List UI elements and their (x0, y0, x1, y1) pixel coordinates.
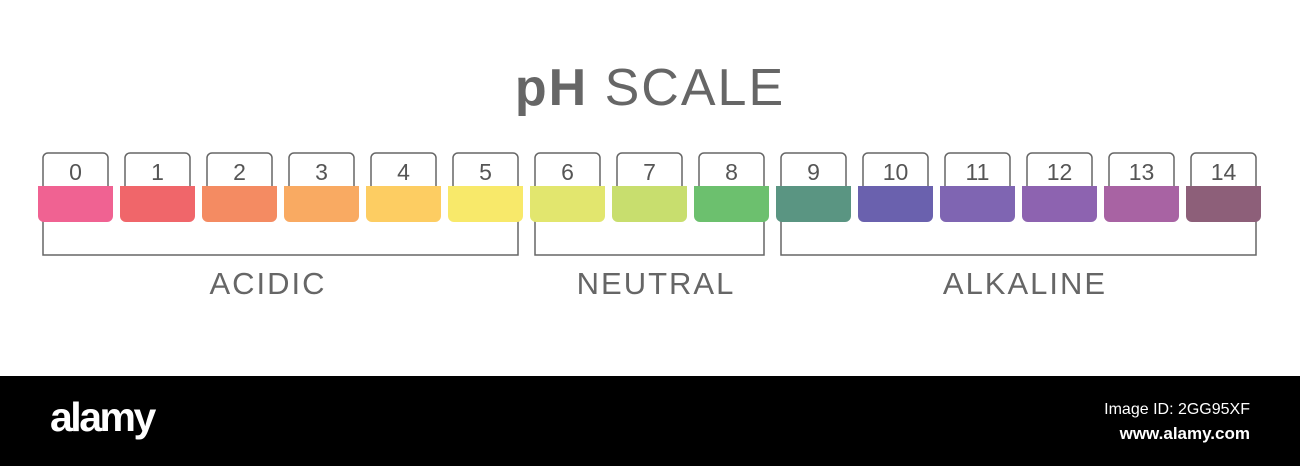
pH cells 0-14: 3 (315, 159, 328, 185)
bracket: acidic (43, 215, 518, 255)
pH cells 0-14: 9 (807, 159, 820, 185)
pH cells 0-14: 7 (643, 159, 656, 185)
logo: alamy: alamy (50, 394, 154, 440)
image id text (1104, 401, 1250, 443)
pH cells 0-14: 1 (151, 159, 164, 185)
pH cells 0-14: 0 (69, 159, 82, 185)
bracket: alkaline (781, 215, 1256, 255)
pH cells 0-14: 5 (479, 159, 492, 185)
pH cells 0-14: 12 (1047, 159, 1072, 185)
image id text: www.alamy.com (1120, 424, 1250, 443)
pH cells 0-14 (38, 153, 1261, 222)
pH cells 0-14: 11 (966, 159, 989, 185)
label: alkaline: ALKALINE (943, 266, 1107, 301)
bracket: neutral (535, 215, 764, 255)
pH cells 0-14: 6 (561, 159, 574, 185)
pH cells 0-14: 4 (397, 159, 410, 185)
image id text: Image ID: 2GG95XF (1104, 401, 1250, 418)
title: pH SCALE (515, 59, 785, 117)
pH cells 0-14: 8 (725, 159, 738, 185)
footer bar (0, 376, 1300, 466)
label: neutral: NEUTRAL (577, 266, 735, 301)
pH cells 0-14: 13 (1129, 159, 1154, 185)
pH cells 0-14: 2 (233, 159, 246, 185)
pH cells 0-14: 14 (1211, 159, 1236, 185)
pH cells 0-14: 10 (883, 159, 908, 185)
label: acidic: ACIDIC (209, 266, 327, 301)
